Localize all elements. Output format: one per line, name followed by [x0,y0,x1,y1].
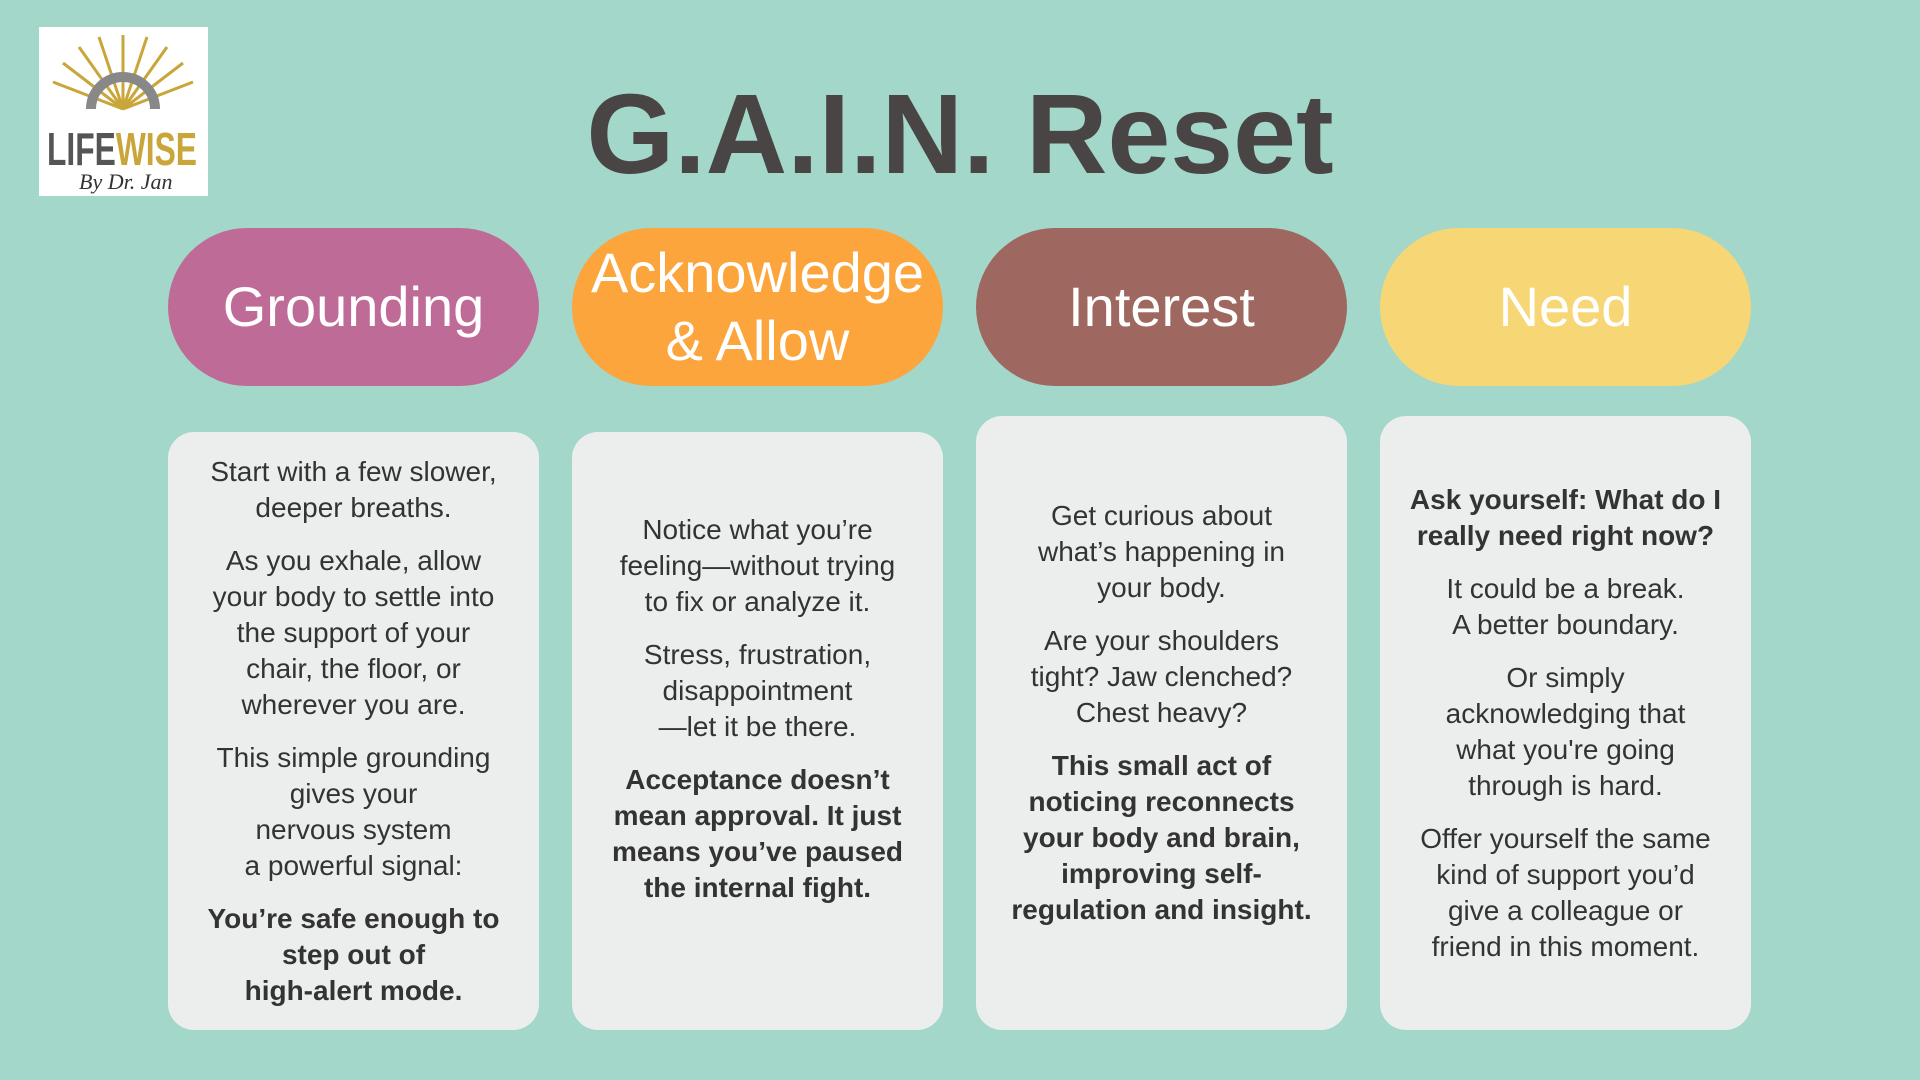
card: Interest: your body. [1097,572,1226,603]
card: Acknowledge [572,432,943,1030]
pill: Interest [976,228,1347,386]
card: Grounding: nervous system [255,814,452,844]
card: Interest: tight? Jaw clenched? [1031,661,1292,692]
card: Acknowledge: disappointment [663,675,852,706]
card: Need: friend in this moment. [1432,930,1699,962]
card: Grounding: This simple grounding [217,742,490,772]
card: Need: A better boundary. [1452,608,1679,640]
pill: Interest: Interest [1068,275,1255,338]
card: Need: really need right now? [1417,520,1714,550]
card: Interest: your body and brain, [1023,822,1300,853]
pill: Need [1380,228,1751,386]
pill: Need: Need [1499,275,1632,338]
card: Acknowledge: means you’ve paused [612,836,903,867]
card: Interest: improving self- [1061,858,1262,889]
card: Grounding: chair, the floor, or [246,652,461,684]
pill: Grounding [168,228,539,386]
pill: Grounding: Grounding [223,275,484,338]
card: Need [1380,416,1751,1030]
card: Interest: Are your shoulders [1044,625,1279,656]
card: Need: It could be a break. [1446,572,1685,604]
card: Grounding: Start with a few slower, [210,456,497,486]
logo: By Dr. Jan [79,169,172,194]
card: Grounding: gives your [290,778,417,808]
card: Acknowledge: Acceptance doesn’t [625,764,890,795]
card: Acknowledge: Notice what you’re [642,514,873,545]
card: Need: what you're going [1456,734,1675,764]
card: Need: kind of support you’d [1436,858,1695,890]
card: Grounding: your body to settle into [213,580,494,612]
card: Acknowledge: Stress, frustration, [644,639,871,670]
card: Acknowledge: —let it be there. [659,711,856,742]
card: Interest: regulation and insight. [1011,894,1312,925]
title: G.A.I.N. Reset [586,71,1334,197]
card: Grounding: deeper breaths. [255,492,452,522]
card: Need: Offer yourself the same [1420,822,1711,854]
pill: Acknowledge & Allow: Acknowledge [591,241,924,304]
logo [39,27,208,196]
card: Grounding: step out of [282,938,425,970]
pill: Acknowledge & Allow [572,228,943,386]
card: Interest: noticing reconnects [1028,786,1295,817]
card: Acknowledge: feeling—without trying [620,550,895,581]
card: Acknowledge: mean approval. It just [614,800,901,831]
card: Grounding: high-alert mode. [245,974,462,1006]
card: Acknowledge: to fix or analyze it. [645,586,870,617]
card: Interest: Get curious about [1051,500,1272,531]
card: Grounding: the support of your [237,616,470,648]
card: Grounding: You’re safe enough to [208,902,499,934]
card: Grounding: wherever you are. [241,688,466,720]
card: Need: through is hard. [1468,770,1663,800]
card: Interest: Chest heavy? [1076,697,1247,728]
card: Need: acknowledging that [1446,698,1685,728]
pill: Acknowledge & Allow: & Allow [666,309,849,372]
card: Interest [976,416,1347,1030]
card: Need: give a colleague or [1448,894,1683,926]
card: Interest: This small act of [1052,750,1271,781]
card: Need: Ask yourself: What do I [1410,484,1721,514]
card: Interest: what’s happening in [1038,536,1285,567]
card: Acknowledge: the internal fight. [644,872,871,903]
card: Grounding: As you exhale, allow [226,544,481,576]
card: Need: Or simply [1506,662,1625,692]
card: Grounding [168,432,539,1030]
card: Grounding: a powerful signal: [245,850,462,880]
